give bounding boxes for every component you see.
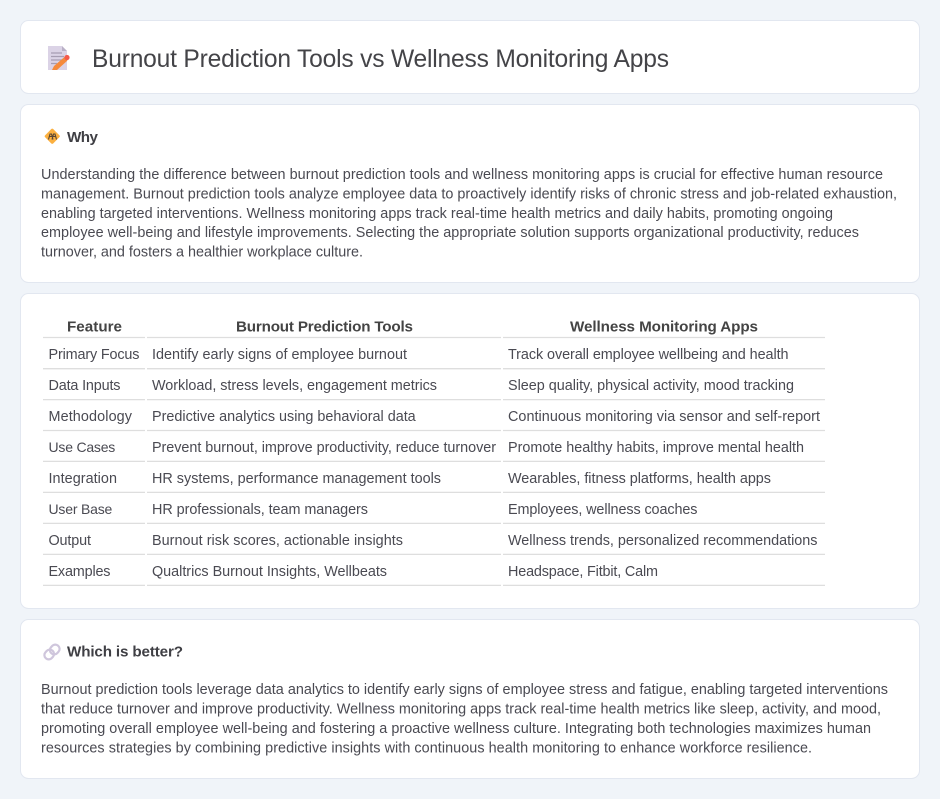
table row: data inputs: Data Inputs	[48, 378, 120, 394]
text block: why paragraph	[41, 167, 897, 260]
table row: primary focus	[48, 347, 788, 363]
text block: why paragraph: Understanding the difference between burnout prediction tools and wellness monitoring apps is crucial for effective human resource	[41, 167, 883, 183]
table row: data inputs	[48, 378, 794, 394]
icon: chain link	[43, 643, 61, 661]
panel: why	[20, 104, 920, 282]
table row: integration	[48, 471, 771, 487]
table row: data inputs: Workload, stress levels, engagement metrics	[152, 378, 437, 394]
table row: use cases: Use Cases	[48, 439, 115, 455]
text block: why paragraph: employee well-being and lifestyle improvements. Selecting the appropriate solution supports organizational productivity, reduces	[41, 225, 859, 241]
panel: comparison table	[20, 294, 920, 608]
title: Burnout Prediction Tools vs Wellness Monitoring Apps	[92, 46, 669, 73]
text block: which is better paragraph: Burnout prediction tools leverage data analytics to identify early signs of employee stress and fatigue, enabling targeted interventions	[41, 682, 888, 698]
table row: user base: User Base	[48, 501, 113, 517]
text block: which is better paragraph: resources strategies by combining predictive insights with continuous health monitoring to enhance workforce resilience.	[41, 740, 812, 756]
table row: use cases	[48, 439, 804, 456]
table row: methodology	[48, 409, 820, 425]
table row: use cases: Promote healthy habits, improve mental health	[508, 440, 804, 456]
panel: which is better	[20, 620, 920, 778]
table row: examples: Qualtrics Burnout Insights, Wellbeats	[152, 564, 387, 580]
table row: output: Burnout risk scores, actionable insights	[152, 533, 403, 549]
table row: output	[48, 533, 818, 549]
table row: methodology: Predictive analytics using behavioral data	[152, 409, 416, 425]
table row: primary focus: Primary Focus	[48, 347, 140, 363]
text block: which is better paragraph	[41, 682, 888, 756]
table header row: Wellness Monitoring Apps	[570, 318, 758, 336]
text block: why paragraph: turnover, and fosters a healthier workplace culture.	[41, 244, 363, 260]
table row: use cases: Prevent burnout, improve productivity, reduce turnover	[152, 440, 496, 456]
heading: which is better: Which is better?	[67, 644, 183, 660]
table row: integration: Integration	[48, 471, 117, 487]
icon: document with pencil	[48, 46, 70, 70]
table row: primary focus: Identify early signs of employee burnout	[152, 347, 407, 363]
table row: output: Wellness trends, personalized recommendations	[508, 533, 818, 549]
table row: examples	[48, 564, 658, 580]
table row: integration: HR systems, performance management tools	[152, 471, 441, 487]
table header row: Burnout Prediction Tools	[236, 318, 413, 336]
table row: output: Output	[48, 533, 91, 549]
table header row	[67, 318, 758, 336]
table row: user base: HR professionals, team managers	[152, 502, 368, 518]
text block: why paragraph: management. Burnout prediction tools analyze employee data to proactively identify risks of chronic stress and job-related exhaustion,	[41, 186, 897, 202]
icon: orange diamond sign	[44, 128, 60, 144]
table row: data inputs: Sleep quality, physical activity, mood tracking	[508, 378, 794, 394]
table row: methodology: Continuous monitoring via sensor and self-report	[508, 409, 820, 425]
heading: why: Why	[67, 129, 99, 146]
table header row: Feature	[67, 318, 122, 336]
table row: methodology: Methodology	[48, 409, 133, 425]
table row: user base: Employees, wellness coaches	[508, 502, 698, 518]
table row: primary focus: Track overall employee wellbeing and health	[508, 347, 788, 363]
table row: integration: Wearables, fitness platforms, health apps	[508, 471, 771, 487]
text block: which is better paragraph: promoting overall employee well-being and fostering a proactive wellness culture. Integrating both technologies maximizes human	[41, 721, 871, 737]
table row: user base	[48, 501, 698, 518]
text block: which is better paragraph: that reduce turnover and improve productivity. Wellness monitoring apps track real-time health metrics like sleep, activity, and mood,	[41, 702, 881, 718]
text block: why paragraph: enabling targeted interventions. Wellness monitoring apps track real-time health metrics and daily habits, promoting ongoing	[41, 206, 833, 222]
panel: title header	[20, 20, 920, 94]
table row: examples: Examples	[48, 564, 110, 580]
table row: examples: Headspace, Fitbit, Calm	[508, 564, 658, 580]
